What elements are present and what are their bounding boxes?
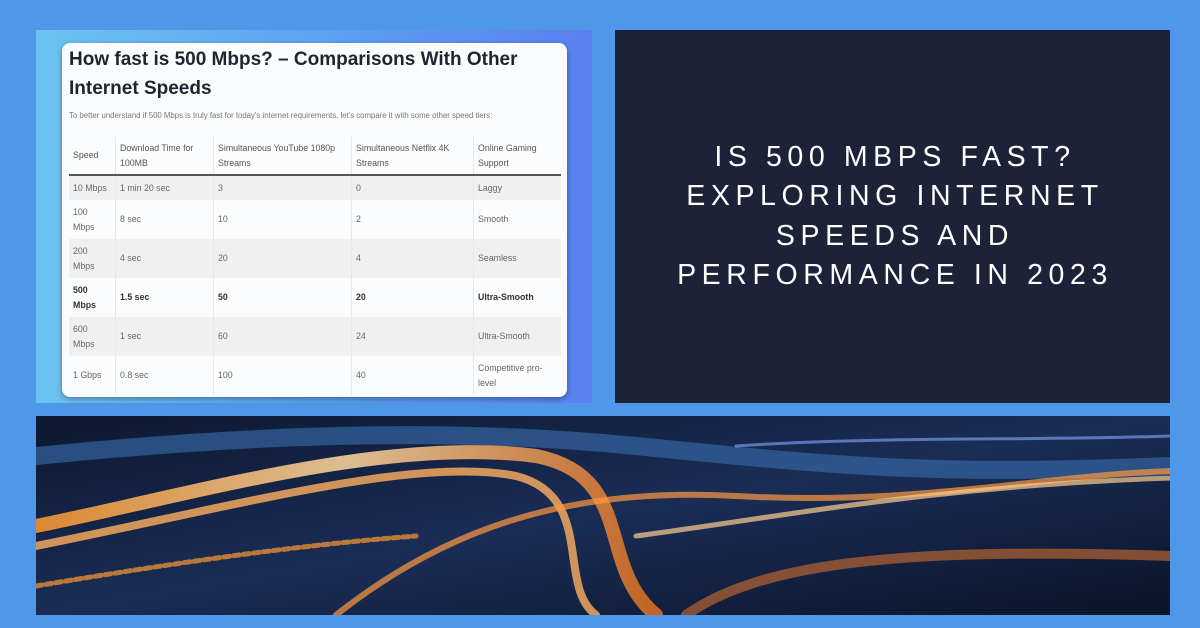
panel: screenshot background <box>36 30 592 403</box>
table: 100 <box>218 370 233 380</box>
table: Mbps <box>73 260 95 270</box>
table: 3 <box>218 182 223 192</box>
table: 20 <box>218 253 228 263</box>
table: 200 <box>73 246 88 256</box>
table: 0 <box>356 182 361 192</box>
table: Simultaneous YouTube 1080p Streams <box>218 142 335 168</box>
table: 600 <box>73 324 88 334</box>
table: Speed <box>73 150 98 160</box>
table: Download Time for 100MB <box>120 142 193 168</box>
table: 4 sec <box>120 253 141 263</box>
title text <box>677 140 1113 291</box>
table: 8 sec <box>120 214 141 224</box>
table: 1 Gbps <box>73 370 101 380</box>
table: 40 <box>356 370 366 380</box>
table: Laggy <box>478 182 502 192</box>
table: Mbps <box>73 338 95 348</box>
table: Ultra-Smooth <box>478 331 530 341</box>
card: comparison table screenshot <box>62 43 567 397</box>
table: Smooth <box>478 214 508 224</box>
title text: EXPLORING INTERNET <box>686 180 1104 212</box>
table: Seamless <box>478 253 517 263</box>
table: Mbps <box>73 300 96 310</box>
image: light-speed streaks <box>36 416 1170 615</box>
table: 10 Mbps <box>73 182 107 192</box>
table: Online Gaming Support <box>478 142 537 168</box>
table: 4 <box>356 253 361 263</box>
table: 20 <box>356 292 366 302</box>
table: 10 <box>218 214 228 224</box>
title text: PERFORMANCE IN 2023 <box>677 259 1113 291</box>
panel: title <box>615 30 1170 403</box>
table: Competitive pro-level <box>478 362 543 388</box>
table: 1.5 sec <box>120 292 149 302</box>
intro text: To better understand if 500 Mbps is truly fast for today's internet requirements, let's compare it with some other speed tiers: <box>69 111 492 120</box>
table: 50 <box>218 292 228 302</box>
table: 500 <box>73 284 88 294</box>
table: 2 <box>356 214 361 224</box>
table: 60 <box>218 331 228 341</box>
title text: IS 500 MBPS FAST? <box>714 140 1076 172</box>
table: 0.8 sec <box>120 370 148 380</box>
heading: How fast is 500 Mbps? – Comparisons With Other Internet Speeds <box>69 49 518 99</box>
table <box>69 137 561 395</box>
table: 1 sec <box>120 331 141 341</box>
table: 100 <box>73 206 88 216</box>
table: 1 min 20 sec <box>120 182 170 192</box>
title text: SPEEDS AND <box>776 220 1014 252</box>
table: Simultaneous Netflix 4K Streams <box>356 142 449 168</box>
table: 24 <box>356 331 366 341</box>
table: Ultra-Smooth <box>478 292 534 302</box>
table: Mbps <box>73 222 95 232</box>
